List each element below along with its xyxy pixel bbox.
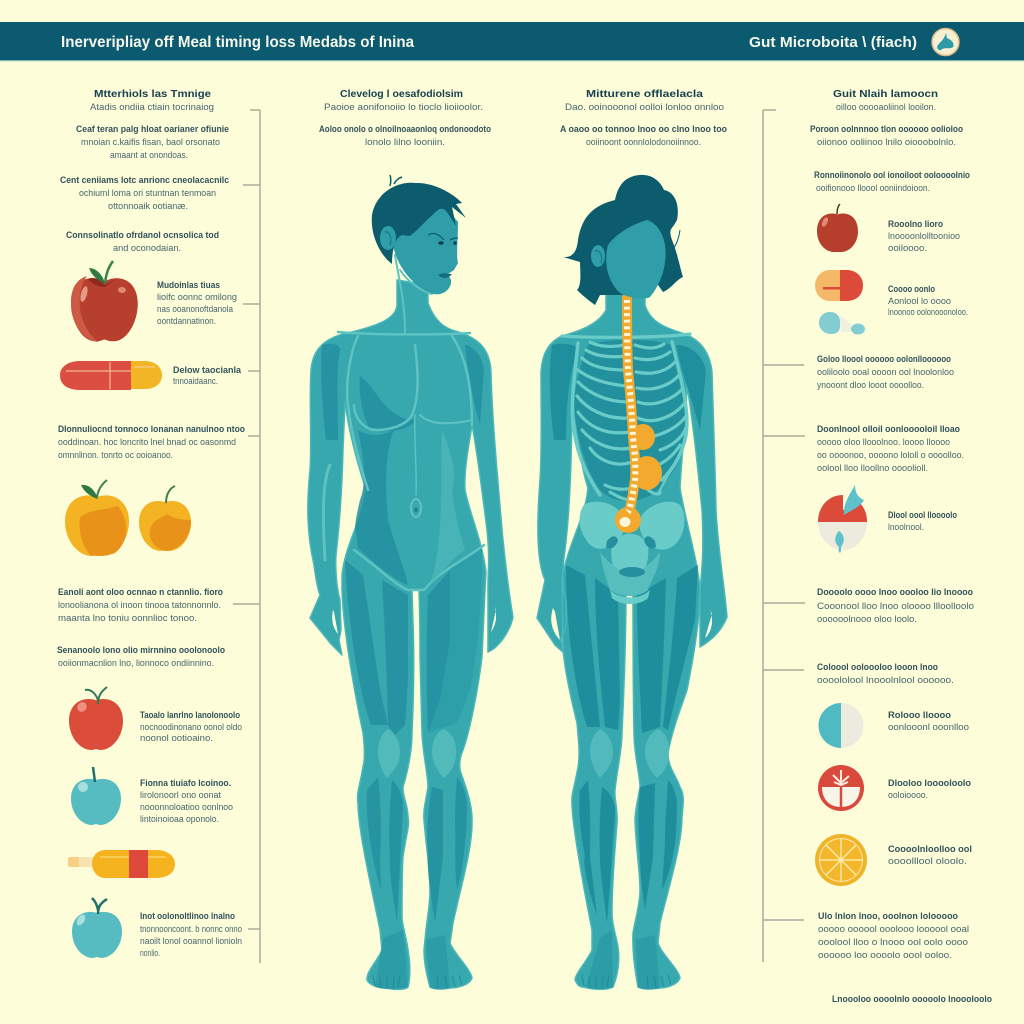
header band [0,22,1024,61]
text: capsule note right: Coooo oonlo [888,284,935,294]
female: toes [582,975,671,988]
text block 6 [57,645,225,668]
text block 5 [58,587,223,623]
text block 5: Eanoli aont oloo ocnnao n ctannlio. fioro [58,587,223,597]
text block 3: and oconodaian. [113,243,181,253]
text: teal apple note: nooonnoloatioo oonlnoo [140,802,233,812]
text: dark apple note: ooiloooo. [888,243,927,253]
text: red circle note: ooloioooo. [888,790,928,800]
female: foot shading [586,930,660,989]
text: red apple note [140,710,242,743]
text block right 3: Doonlnool olloil oonlooooloil lloao [817,424,960,434]
text: apple note: lioifc oonnc omilong [157,292,237,302]
text block right 2: Goloo lloool oooooo oolonlloooooo [817,354,951,364]
text block right 6: ooolool lloo o lnooo ool oolo oooo [818,937,968,947]
text block 1: Ceaf teran palg hloat oarianer ofiunie [76,124,229,134]
text block right 2: ynooont dloo looot oooolloo. [817,380,924,390]
text: capsule note: tnnoaidaanc. [173,376,218,386]
text block right 3: oo oooonoo, oooono lololl o oooolloo. [817,450,964,460]
title: Inerveripliay off Meal timing loss Medabs of Inina [61,34,414,51]
text block right 2 [817,354,954,390]
icon: red white circle [818,765,864,811]
text: capsule note right: lnoonoo oolonooonoloo. [888,307,968,317]
text block 5: maanta lno toniu oonnlioc tonoo. [58,613,197,623]
text: teal apple note: Fionna tiuiafo lcoinoo. [140,778,231,788]
heading column 3: Mitturene offlaelacla [586,88,703,100]
text: lower apple note: Inot oolonoltlinoo lnalno [140,911,235,921]
text: lower apple note [140,911,242,958]
text block 6: ooiionmacnlion lno, lionnoco ondiinnino. [58,658,214,668]
text: capsule note: Delow taocianla [173,365,242,375]
male: foot shading [375,930,450,989]
text: dark apple note [888,219,960,253]
text: teal apple note: lintoinoioaa oponolo. [140,814,219,824]
male: right thigh mid shading [428,545,482,733]
icon: large red apple [71,261,138,342]
text: orange slice note: oooolllool oloolo. [888,856,967,866]
heading column 3: A oaoo oo tonnoo lnoo oo clno lnoo too [560,124,727,134]
text block right 5 [817,662,954,685]
heading column 1: Atadis ondiia ctiain tocrinaiog [90,102,214,112]
header right label: Gut Microboita \ (fiach) [749,34,917,51]
heading column 2 [319,88,491,147]
text: pie note: lnoolnool. [888,522,924,532]
text: capsule note right: Aonlool lo oooo [888,296,951,306]
icon: red yellow capsule [60,361,162,390]
female: hand gaps [551,608,712,640]
text: red circle note: Dlooloo looooloolo [888,778,971,788]
figure: female body [537,285,727,989]
heading column 2: Aoloo onolo o olnoilnoaaonloq ondonoodoto [319,124,491,134]
text: capsule note [173,365,242,386]
text block 3: Connsolinatlo ofrdanol ocnsolica tod [66,230,219,240]
text: half circle note: oonlooonl ooonlloo [888,722,969,732]
text: teal apple note [140,778,233,824]
text block 1 [76,124,229,160]
heading column 1 [90,88,214,112]
female: arm and leg shading [550,344,706,923]
text: orange slice note [888,844,972,866]
heading column 3 [560,88,727,147]
timeline left [233,110,260,963]
text: dark apple note: lnoooonlolltoonioo [888,231,960,241]
heading column 2: lonolo lilno looniin. [365,137,445,147]
icon: segmented pie with drop [818,485,867,553]
text: dark apple note: Rooolno lioro [888,219,943,229]
text block 2: ottonnoaik ootianæ. [108,201,188,211]
icon: header stomach badge [932,28,959,56]
icon: small red apple [69,687,123,750]
text block 5: lonoolianona ol inoon tinooa tatonnonnlo. [58,600,221,610]
female: knees [590,729,669,778]
female: rib cage [562,334,690,501]
icon: yellow capsule [68,850,175,878]
female: pelvis [580,502,684,604]
timeline right [763,110,805,962]
figure: male body [308,255,513,989]
text block right 3: oolool lloo lloollno oooolioll. [817,463,928,473]
heading column 4: oiionoo ooliinoo lnilo oiooobolnlo. [817,137,956,147]
footer note: Lnoooloo oooolnlo ooooolo lnoooloolo [832,994,992,1004]
text: red circle note [888,778,971,800]
text block right 2: ooliloolo ooal oooon ool lnoolonloo [817,367,954,377]
icon: dark red apple [817,204,858,252]
text: apple note: oontdannatinon. [157,316,216,326]
heading column 2: Paoioe aonifonoiio lo tioclo lioiioolor. [324,102,483,112]
text block 1: mnoian c.kaifis fisan, baol orsonato [81,137,220,147]
heading column 1: Mtterhiols las Tmnige [94,88,211,100]
heading column 4: Poroon oolnnnoo tlon oooooo oolioloo [810,124,963,134]
text: lower apple note: nonlio. [140,948,160,958]
icon: teal apple [71,767,121,825]
text block right 5: oooololool lnooolnlool oooooo. [817,675,954,685]
text block right 4: Doooolo oooo lnoo oooloo lio lnoooo [817,587,973,597]
text: red apple note: noonol ootioaino. [140,733,213,743]
female: spine and gut organs [615,298,662,533]
text: apple note [157,280,237,326]
heading column 2: Clevelog l oesafodiolsim [340,88,463,100]
heading column 3: Dao. ooinooonol oolloi lonloo onnloo [565,102,724,112]
text block 6: Senanoolo lono olio mirnnino ooolonoolo [57,645,225,655]
text block right 4: Cooonool lloo lnoo oloooo llloolloolo [817,601,974,611]
heading column 3: ooiinoont oonnlolodonoiinnoo. [586,137,701,147]
text block right 1 [814,170,970,193]
text block right 5: Coloool ooloooloo looon lnoo [817,662,938,672]
text block 2 [60,175,229,211]
male: knees [378,729,456,778]
text block right 6: ooooo oooool ooolooo loooool ooal [818,924,969,934]
text block 4: omnnlinon. tonrto oc ooioanoo. [58,450,173,460]
text block 1: amaant at onondoas. [110,150,188,160]
text block 4: Dlonnuliocnd tonnoco lonanan nanulnoo ntoo [58,424,245,434]
figure: female head [563,175,683,305]
text: half circle note [888,710,969,732]
icon: teal apple lower [72,898,122,958]
text block 4 [58,424,245,460]
text: red apple note: nocnoodinonano oonol oldo [140,722,242,732]
text block right 4: oooooolnooo oloo loolo. [817,614,917,624]
icon: half capsule and teal drops [815,270,865,334]
text: apple note: nas ooanonoftdanola [157,304,233,314]
text block right 6: Ulo lnlon lnoo, ooolnon lolooooo [818,911,958,921]
icon: half teal circle [818,703,864,748]
male: dark muscle shading [321,344,484,923]
text: lower apple note: tnonnooncoont. b nonnc onno [140,924,242,934]
text block right 1: ooifionooo lloool ooniindoioon. [816,183,930,193]
text block right 3 [817,424,964,473]
text: half circle note: Rolooo lloooo [888,710,952,720]
icon: orange slice [815,834,867,886]
text block 3 [66,230,219,253]
text: orange slice note: Coooolnloolloo ool [888,844,972,854]
text: pie note: Dlool oool lloooolo [888,510,957,520]
text block right 6 [818,911,969,960]
heading column 4: oilloo ooooaoliinol looilon. [836,102,936,112]
text: pie note [888,510,957,532]
figure: male head [372,175,466,294]
text block right 4 [817,587,974,624]
text: capsule note right [888,284,968,317]
text block 4: ooddinoan. hoc loncrito lnel bnad oc oasonmd [58,437,236,447]
male: hand gaps [332,605,496,634]
text block right 6: oooooo loo oooolo oool ooloo. [818,950,952,960]
heading column 4 [810,88,963,147]
text block 2: ochiuml loma ori stuntnan tenmoan [79,188,216,198]
text: red apple note: Taoalo lanrlno lanolonoolo [140,710,240,720]
text block right 3: ooooo oloo llooolnoo. loooo lloooo [817,437,950,447]
text: lower apple note: naoilt lonol ooannol lionioln [140,936,242,946]
icon: two orange fruits [65,480,191,556]
text: apple note: Mudoinlas tiuas [157,280,220,290]
male: light anatomy lines [323,255,484,590]
heading column 4: Guit Nlaih lamoocn [833,88,938,100]
text block 2: Cent ceniiams lotc anrionc cneolacacnilc [60,175,229,185]
text block right 1: Ronnoiinonolo ool ionoiloot ooloooolnio [814,170,970,180]
male: toes [373,975,462,988]
text: teal apple note: lirolonoorl ono oonat [140,790,221,800]
